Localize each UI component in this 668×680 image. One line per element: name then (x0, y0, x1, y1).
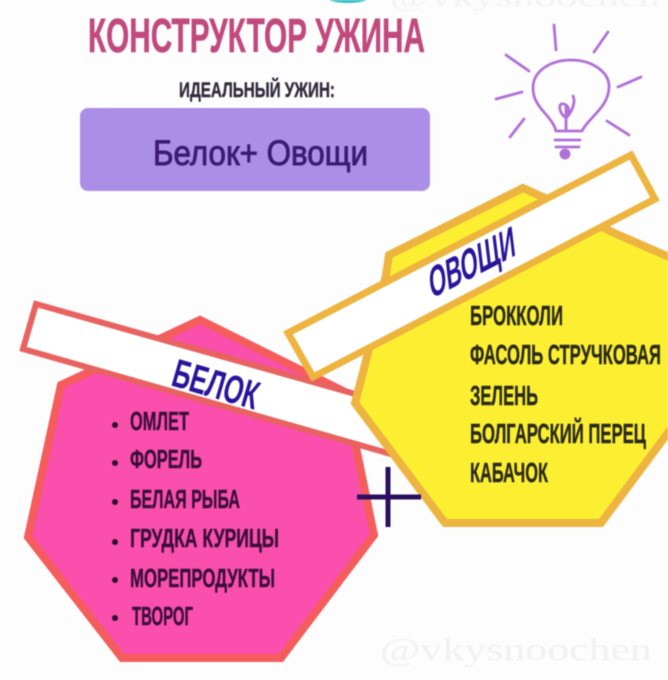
vegetables list: КАБАЧОК (470, 457, 549, 488)
formula box (80, 108, 430, 191)
protein list: ТВОРОГ (132, 601, 193, 631)
plus sign (357, 467, 421, 527)
protein list: МОРЕПРОДУКТЫ (130, 563, 275, 593)
vegetables list: БРОККОЛИ (470, 300, 563, 331)
panel: vegetables (288, 155, 668, 523)
formula box: Белок+ Овощи (153, 134, 368, 173)
watermark: @vkysnoochen (380, 631, 652, 667)
protein list (130, 406, 279, 631)
protein list: БЕЛАЯ РЫБА (130, 484, 240, 514)
protein label: БЕЛОК (167, 352, 264, 419)
plus overlap on polygon (357, 494, 421, 500)
subtitle: ИДЕАЛЬНЫЙ УЖИН: (179, 78, 335, 102)
vegetables list: ЗЕЛЕНЬ (470, 380, 538, 411)
icon: light bulb (496, 25, 641, 158)
vegetables band (288, 155, 655, 377)
protein list: ФОРЕЛЬ (130, 444, 202, 474)
title: КОНСТРУКТОР УЖИНА (88, 10, 425, 63)
protein list: ОМЛЕТ (130, 406, 189, 436)
protein polygon (28, 320, 374, 658)
protein bullets (112, 422, 118, 621)
top teal remnant (325, 0, 371, 3)
protein list: ГРУДКА КУРИЦЫ (130, 523, 279, 553)
vegetables list (470, 300, 661, 488)
vegetables polygon (355, 188, 668, 523)
protein band (23, 304, 405, 458)
vegetables label: ОВОЩИ (427, 217, 518, 309)
panel: protein (23, 304, 405, 658)
